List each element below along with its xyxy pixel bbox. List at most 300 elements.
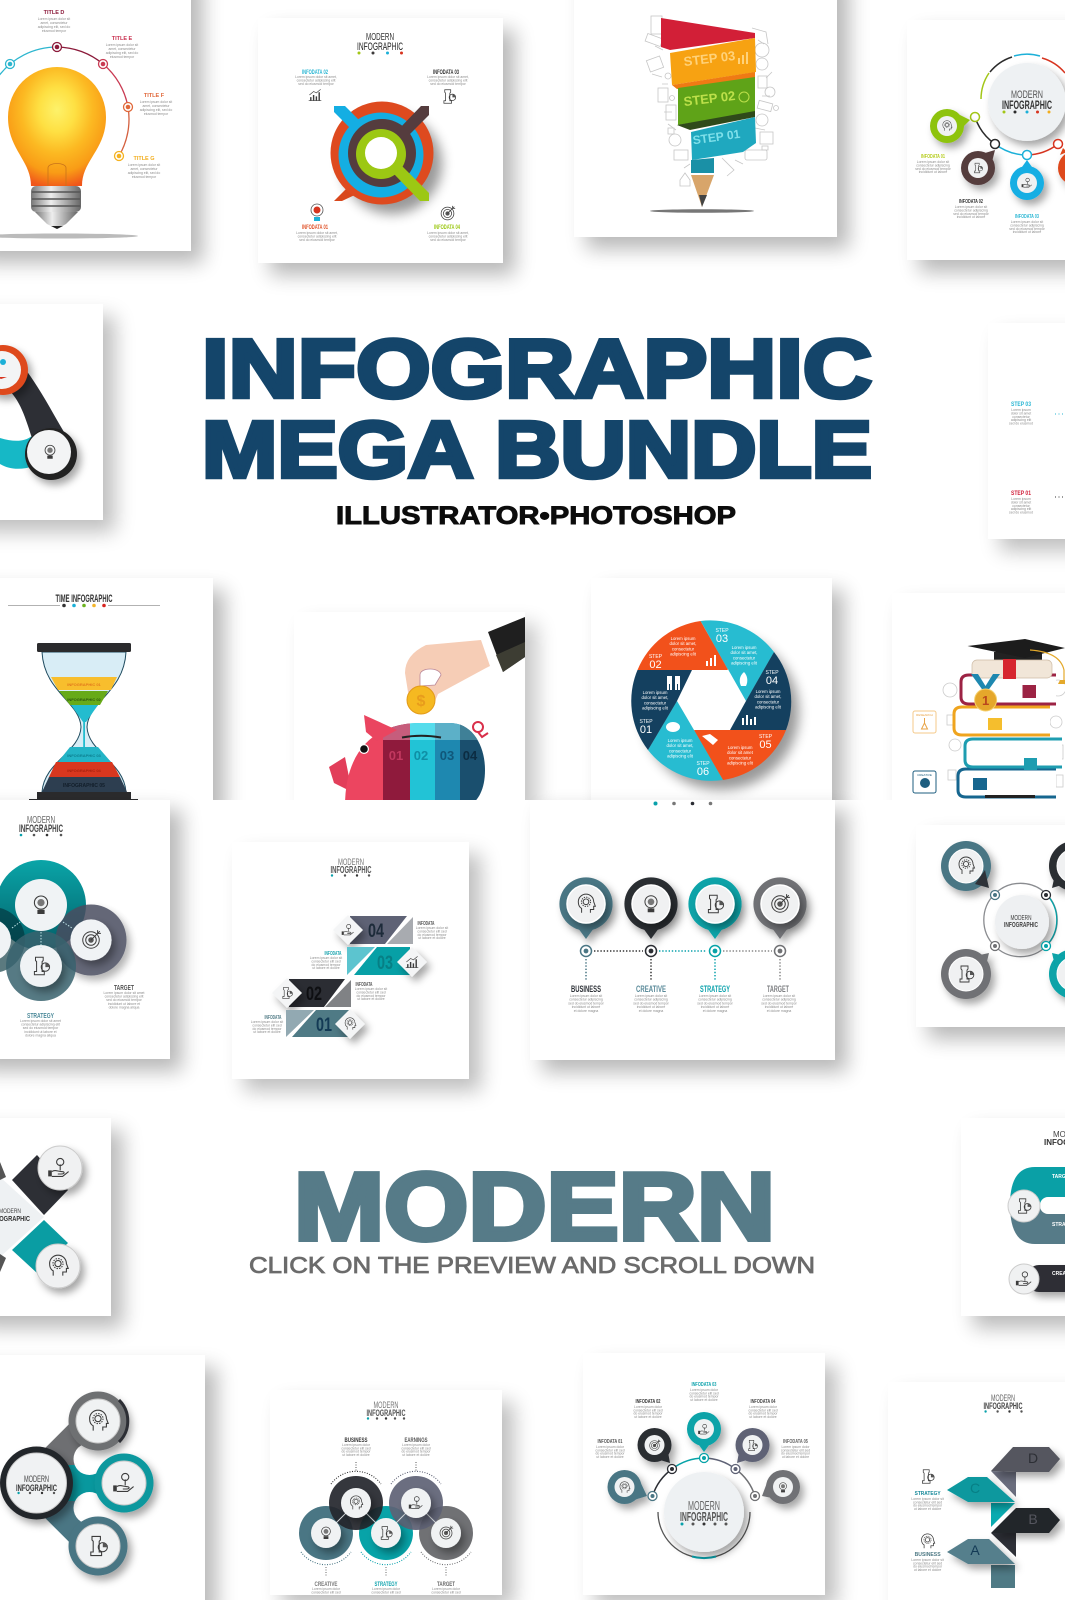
green band: STEP 02 — [683, 88, 736, 109]
sand labels: INFOGRAPHIC 01 — [67, 682, 102, 687]
heading: INFOGRAPHIC — [366, 1408, 406, 1418]
central disc — [658, 1472, 750, 1558]
segment: step 01: 01 — [640, 724, 652, 736]
node: top — [68, 1392, 128, 1450]
labels: INFODATA — [264, 1015, 282, 1021]
segment: step 01: Lorem ipsum — [643, 690, 667, 695]
segment: step 06: Lorem ipsum — [668, 738, 692, 743]
doodles — [943, 680, 1065, 787]
teal band: STEP 01 — [692, 127, 741, 147]
labels: Lorem ipsum dolor — [781, 1445, 810, 1449]
labels: TITLE F — [144, 93, 165, 99]
pin: head — [941, 841, 991, 891]
heading — [19, 815, 63, 836]
pin: creative: consectetur adipiscing — [634, 998, 668, 1002]
label: strategy: STRATEGY — [27, 1013, 54, 1020]
labels: INFODATA 03 — [692, 1382, 716, 1388]
labels: INFODATA 04 — [750, 1399, 776, 1405]
book: teal — [965, 739, 1062, 770]
labels: INFODATA 02 — [959, 199, 983, 205]
node: hand — [38, 1146, 82, 1190]
labels: consectetur adipiscing — [916, 163, 950, 167]
center heading — [0, 1209, 30, 1223]
center hexagon — [676, 669, 747, 731]
upper orange node — [0, 345, 28, 395]
top labels: do eiusmod tempor — [341, 1450, 371, 1454]
panel: light bulb infographic — [0, 0, 203, 263]
dotted connectors — [586, 951, 780, 980]
panel: semicircle pins — [583, 1353, 837, 1600]
segment: step 03 — [701, 620, 774, 701]
label: target: dolore magna aliqua — [109, 1005, 139, 1009]
top labels: consectetur elit sed — [341, 1446, 371, 1450]
top labels: ut labore et dolore — [342, 1453, 370, 1457]
graduation cap — [968, 639, 1065, 684]
labels: consectetur elit sed — [748, 1408, 778, 1412]
label: target: consectetur adipiscing elit — [105, 995, 143, 999]
labels: Lorem ipsum dolor sit — [140, 100, 172, 104]
labels: ut labore et dolore — [596, 1455, 624, 1459]
hub nodes — [990, 890, 1050, 950]
label: target: sed do eiusmod tempor — [106, 998, 143, 1002]
panel: overlapping circles — [0, 800, 182, 1071]
heading: MODERN — [366, 32, 394, 43]
bottom labels: consectetur elit sed — [311, 1590, 341, 1594]
labels and icons: INFODATA 04 — [434, 224, 460, 231]
labels: do eiusmod tempor — [781, 1452, 811, 1456]
labels: eiusmod tempor — [132, 175, 157, 179]
bottom labels: CREATIVE — [314, 1581, 338, 1588]
panel: modern infographic arc pins — [907, 20, 1065, 272]
node: center heading: MODERN — [24, 1474, 49, 1484]
sand labels: INFOGRAPHIC 03 — [67, 753, 102, 758]
label: business: BUSINESS — [915, 1552, 941, 1558]
label: business: ut labore et dolore — [914, 1568, 941, 1572]
label: strategy: dolore magna aliqua — [25, 1033, 56, 1037]
segment: step 01: consectetur — [644, 700, 667, 705]
label: strategy: Lorem ipsum dolor sit amet — [20, 1019, 61, 1023]
labels and icons: Lorem ipsum dolor sit amet, — [427, 231, 469, 235]
step 03: STEP 03 — [1011, 401, 1031, 408]
hub ring: MODERN — [1010, 915, 1032, 922]
subheading: click on the preview: CLICK ON THE PREVIEW AND SCROLL DOWN — [249, 1252, 815, 1278]
labels: do eiusmod tempor — [689, 1395, 719, 1399]
flag C: C — [970, 1480, 980, 1496]
labels and icons — [295, 69, 469, 242]
labels and icons: INFODATA 01 — [302, 224, 328, 231]
label: business — [911, 1534, 944, 1572]
pin: creative: Lorem ipsum dolor sit — [635, 994, 667, 998]
node: tower — [1008, 1190, 1040, 1222]
flag A: A — [970, 1542, 980, 1558]
segment: step 04: STEP — [765, 670, 779, 676]
segment: step 02: adipiscing elit — [670, 652, 697, 657]
segment: step 06: 06 — [697, 766, 709, 778]
labels: consectetur adipiscing — [954, 208, 988, 212]
bottom labels: STRATEGY — [374, 1581, 398, 1588]
step 01 — [1009, 490, 1065, 515]
heading: MODERN — [991, 1393, 1015, 1403]
label: target: incididunt ut labore et — [108, 1002, 140, 1006]
step 03: 03 — [377, 953, 393, 974]
icon: coin — [407, 686, 435, 714]
segment: step 03: consectetur — [733, 655, 756, 660]
labels — [38, 10, 172, 179]
segment: step 05 — [694, 730, 786, 780]
heading dots — [654, 802, 712, 806]
pin 02 — [638, 1428, 676, 1474]
panel: concentric arrows infographic — [258, 18, 515, 275]
labels and icons: sed do eiusmod tempor — [299, 238, 336, 242]
slate arc — [1010, 1205, 1065, 1244]
labels and icons: consectetur adipiscing elit — [298, 234, 336, 238]
diamond arms — [0, 1155, 68, 1273]
labels: TITLE G — [133, 156, 155, 162]
central disc: INFOGRAPHIC — [680, 1509, 728, 1524]
segment: step 04: adipiscing elit — [755, 705, 782, 710]
top labels: EARNINGS — [404, 1437, 428, 1444]
node: center heading — [0, 1446, 73, 1520]
top labels: ut labore et dolore — [402, 1453, 430, 1457]
segment: step 01: dolor sit amet, — [642, 695, 668, 700]
sand layers — [42, 677, 127, 792]
bottom labels: consectetur elit sed — [371, 1590, 401, 1594]
labels and icons: INFODATA 03 — [433, 69, 459, 76]
ground shadow — [0, 234, 138, 238]
heading: MODERN — [27, 815, 55, 826]
box: creative — [913, 771, 936, 793]
pin: creative: et dolore magna — [639, 1009, 663, 1013]
pin: business: consectetur adipiscing — [569, 998, 603, 1002]
heading: TIME INFOGRAPHIC — [56, 593, 113, 605]
labels: eiusmod tempor — [110, 55, 135, 59]
labels: ut labore et dolore — [634, 1415, 662, 1419]
hub ring: INFOGRAPHIC — [1004, 922, 1038, 929]
panel: piggy bank — [329, 615, 547, 800]
heading — [330, 857, 372, 877]
labels: INFODATA — [418, 921, 435, 927]
node: middle — [94, 1454, 154, 1512]
step 01: 01 — [316, 1015, 332, 1036]
top labels: Lorem ipsum dolor — [342, 1443, 370, 1447]
top labels — [341, 1437, 431, 1457]
hub ring — [984, 883, 1057, 957]
segment: step 05: 05 — [759, 739, 772, 751]
labels: INFODATA 01 — [598, 1439, 622, 1445]
panel: arrow flags — [888, 1382, 1065, 1600]
hourglass glass — [42, 652, 126, 792]
nodes — [970, 112, 1062, 160]
pin: strategy: et dolore magna — [703, 1009, 727, 1013]
step 03: adipiscing elit — [1011, 418, 1031, 422]
labels: do eiusmod tempor — [417, 933, 447, 937]
labels and icons: consectetur adipiscing elit — [429, 78, 467, 82]
dotted arcs — [301, 1462, 471, 1576]
subtitle: ILLUSTRATOR•PHOTOSHOP — [336, 502, 736, 530]
pin: green — [930, 109, 970, 143]
pin: strategy: consectetur adipiscing — [698, 998, 732, 1002]
pin 05 — [750, 1470, 800, 1504]
pin: strategy: Lorem ipsum dolor sit — [699, 994, 731, 998]
label: business: do eiusmod tempor — [913, 1565, 943, 1569]
node: team — [36, 1244, 80, 1288]
panel: books — [892, 593, 1065, 820]
pin: target: Lorem ipsum dolor sit — [763, 994, 795, 998]
wheel shadow — [643, 634, 799, 790]
panel: pencil ribbon infographic — [574, 0, 849, 249]
node: creative — [1009, 1264, 1039, 1294]
segment: step 01: adipiscing elit — [642, 706, 669, 711]
segment: step 02 — [638, 621, 728, 671]
pin: strategy — [688, 877, 742, 1013]
label: strategy: ut labore et dolore — [914, 1507, 941, 1511]
heading: MODERN — [374, 1400, 398, 1410]
box: research — [913, 711, 936, 733]
segment: step 02: Lorem ipsum — [671, 636, 695, 641]
pin 01 — [608, 1470, 657, 1504]
labels: Lorem ipsum dolor — [634, 1405, 662, 1409]
labels: ut labore et dolore — [749, 1415, 777, 1419]
segment: step 04: consectetur — [757, 699, 780, 704]
medal — [971, 674, 1000, 711]
segment: step 02: consectetur — [672, 646, 695, 651]
diploma — [972, 659, 1052, 679]
pin: business: incididunt ut labore — [572, 1005, 600, 1009]
heading: INFOGRAPHIC — [19, 823, 63, 835]
pin: top right — [1049, 841, 1065, 891]
label: target — [104, 985, 144, 1009]
segment: step 06: dolor sit amet, — [666, 743, 694, 748]
labels and icons: Lorem ipsum dolor sit amet, — [296, 231, 338, 235]
heading — [357, 32, 403, 54]
arc hole — [1040, 1197, 1065, 1214]
node: bottom — [68, 1516, 128, 1576]
step 03: consectetur — [1012, 415, 1031, 419]
labels and icons: sed do eiusmod tempor — [430, 82, 467, 86]
pin 03 — [687, 1412, 721, 1462]
segment: step 05: dolor sit amet — [727, 750, 754, 755]
panel: left node cutout — [0, 304, 115, 532]
segment: step 05: consectetur — [729, 755, 752, 760]
segment: step 01: STEP — [639, 719, 653, 725]
heading — [1044, 1130, 1065, 1147]
labels — [595, 1382, 811, 1459]
orange band: STEP 03 — [683, 48, 736, 69]
sand labels: INFOGRAPHIC 02 — [67, 697, 102, 702]
labels and icons: INFODATA 02 — [302, 69, 328, 76]
teal arc — [1010, 1167, 1065, 1205]
labels and icons: sed do eiusmod tempor — [430, 238, 467, 242]
sand labels — [63, 682, 105, 789]
labels — [1052, 1174, 1065, 1277]
segment: step 02: dolor sit amet, — [670, 641, 696, 646]
labels: Lorem ipsum dolor — [690, 1388, 718, 1392]
panel: stepped chevrons — [232, 842, 481, 1091]
segment: step 04: 04 — [766, 675, 778, 687]
segment: step 06: adipiscing elit — [667, 754, 694, 759]
labels: ut labore et dolore — [253, 1030, 281, 1034]
box: creative: CREATIVE — [917, 773, 932, 777]
pig numbers — [389, 748, 478, 763]
pin: creative: sed do eiusmod tempor — [633, 1001, 670, 1005]
connectors — [50, 1430, 106, 1536]
labels: INFODATA 05 — [783, 1439, 808, 1445]
arc timeline — [0, 42, 132, 160]
pin: business: BUSINESS — [571, 984, 601, 994]
bottom labels: consectetur elit sed — [431, 1590, 461, 1594]
segment: step 03: 03 — [716, 633, 728, 645]
labels: do eiusmod tempor — [748, 1412, 778, 1416]
labels: adipiscing elit, sed do — [128, 171, 160, 175]
step 03: sed do eiusmod — [1009, 422, 1033, 426]
pin: business — [559, 877, 613, 1013]
red ribbon band — [661, 18, 755, 50]
segment: step 03: Lorem ipsum — [732, 645, 756, 650]
labels: consectetur elit sed — [595, 1448, 625, 1452]
labels — [915, 154, 1046, 234]
bottom labels: Lorem ipsum dolor — [372, 1587, 400, 1591]
pin: creative: incididunt ut labore — [637, 1005, 665, 1009]
step 04 — [333, 915, 413, 945]
labels — [251, 921, 448, 1034]
label: strategy — [20, 1013, 61, 1037]
orange band — [670, 38, 756, 89]
labels: consectetur adipiscing — [1010, 223, 1044, 227]
labels: INFODATA 03 — [1015, 214, 1039, 220]
labels: Lorem ipsum dolor sit — [106, 43, 138, 47]
labels: do eiusmod tempor — [595, 1452, 625, 1456]
step 04: 04 — [368, 921, 384, 942]
icon: coin: $ — [417, 693, 426, 710]
labels: incididunt ut labore — [1013, 230, 1041, 234]
arc segments — [975, 54, 1065, 155]
node: center heading: INFOGRAPHIC — [16, 1483, 57, 1493]
step 03 — [347, 947, 427, 977]
labels: sed do eiusmod tempor — [1009, 227, 1046, 231]
heading — [984, 1393, 1023, 1413]
lower node — [25, 428, 77, 480]
pin: target: incididunt ut labore — [765, 1005, 793, 1009]
labels: TITLE D — [44, 10, 64, 16]
panel: hourglass — [0, 578, 225, 820]
labels: ut labore et dolore — [312, 966, 340, 970]
flag C — [947, 1477, 1015, 1527]
step 01: Lorem ipsum — [1011, 497, 1031, 501]
panel: right steps cutout — [988, 323, 1065, 551]
pin: orange — [1058, 148, 1065, 185]
dark pill — [1026, 1265, 1065, 1292]
label: strategy: Lorem ipsum dolor sit — [911, 1497, 944, 1501]
panel: metaball nodes — [0, 1355, 217, 1600]
labels: consectetur elit sed — [689, 1391, 719, 1395]
book: navy — [958, 769, 1056, 798]
top labels: do eiusmod tempor — [401, 1450, 431, 1454]
labels: consectetur elit sed — [781, 1448, 810, 1452]
box: research: RESEARCH — [916, 713, 933, 717]
heading — [366, 1400, 406, 1420]
heading: INFOGRAPHIC — [330, 865, 372, 876]
pin: business: Lorem ipsum dolor sit — [570, 994, 602, 998]
labels: Lorem ipsum dolor sit — [955, 205, 987, 209]
labels: INFODATA 02 — [636, 1399, 660, 1405]
step 02 — [272, 978, 351, 1008]
pin: strategy: sed do eiusmod tempor — [697, 1001, 734, 1005]
labels: consectetur elit sed — [252, 1023, 282, 1027]
labels and icons: Lorem ipsum dolor sit amet, — [295, 75, 337, 79]
label: strategy: sed do eiusmod tempor — [23, 1026, 59, 1030]
pencil tip — [691, 175, 714, 207]
labels: consectetur elit sed — [356, 990, 386, 994]
top labels: BUSINESS — [344, 1437, 368, 1444]
segment: step 05: STEP — [759, 734, 773, 740]
teal band — [691, 117, 756, 173]
step 01 — [286, 1009, 365, 1039]
labels: adipiscing elit, sed do — [38, 25, 70, 29]
top cap — [37, 643, 131, 652]
segment: step 01 — [631, 670, 692, 750]
step 01: STEP 01 — [1011, 490, 1031, 497]
main title — [202, 322, 872, 494]
segment: step 03: adipiscing elit — [731, 661, 758, 666]
pin: target: et dolore magna — [767, 1009, 791, 1013]
labels: amet, consectetur — [143, 104, 170, 108]
top labels: Lorem ipsum dolor — [402, 1443, 430, 1447]
labels: amet, consectetur — [41, 21, 68, 25]
labels: eiusmod tempor — [144, 112, 169, 116]
pin: blue — [1010, 160, 1044, 200]
label: strategy: do eiusmod tempor — [913, 1504, 943, 1508]
labels and icons: consectetur adipiscing elit — [297, 78, 335, 82]
upper arc — [652, 1458, 755, 1496]
panel: six step wheel — [591, 578, 844, 820]
label: strategy: consectetur elit sed — [913, 1500, 942, 1504]
step 01: dolor sit amet — [1011, 500, 1031, 504]
labels: sed do eiusmod tempor — [953, 212, 990, 216]
heading: MODERN — [338, 857, 364, 867]
labels: amet, consectetur — [131, 167, 158, 171]
ground shadow — [650, 209, 754, 213]
dark connector — [6, 370, 64, 438]
panel: X diamond — [0, 1118, 123, 1328]
segment: step 02: 02 — [649, 659, 662, 671]
panel: C shaped steps — [961, 1118, 1065, 1328]
label: business: Lorem ipsum dolor sit — [911, 1558, 944, 1562]
segment: step 06: STEP — [696, 761, 710, 767]
labels: ut labore et dolore — [357, 997, 385, 1001]
doodles — [645, 16, 778, 186]
labels: do eiusmod tempor — [311, 963, 341, 967]
label: business: consectetur elit sed — [913, 1561, 942, 1565]
bottom labels: Lorem ipsum dolor — [432, 1587, 460, 1591]
chart: concentric rings — [330, 102, 442, 214]
labels: ut labore et dolore — [782, 1455, 809, 1459]
teal connector — [0, 436, 34, 469]
labels: do eiusmod tempor — [356, 994, 386, 998]
pig numbers: 04 — [463, 748, 478, 763]
pin: target — [753, 877, 807, 1013]
labels: Lorem ipsum dolor sit — [128, 163, 160, 167]
labels: INFODATA 01 — [921, 154, 945, 160]
pin: teal — [1049, 949, 1065, 999]
labels: adipiscing elit, sed do — [140, 108, 172, 112]
pin 04 — [731, 1428, 770, 1474]
labels: consectetur elit sed — [417, 929, 447, 933]
pin: business: et dolore magna — [574, 1009, 598, 1013]
pin: business: sed do eiusmod tempor — [568, 1001, 605, 1005]
labels: ut labore et dolore — [690, 1398, 718, 1402]
step 01: consectetur — [1012, 504, 1031, 508]
labels: Lorem ipsum dolor sit — [251, 1020, 283, 1024]
